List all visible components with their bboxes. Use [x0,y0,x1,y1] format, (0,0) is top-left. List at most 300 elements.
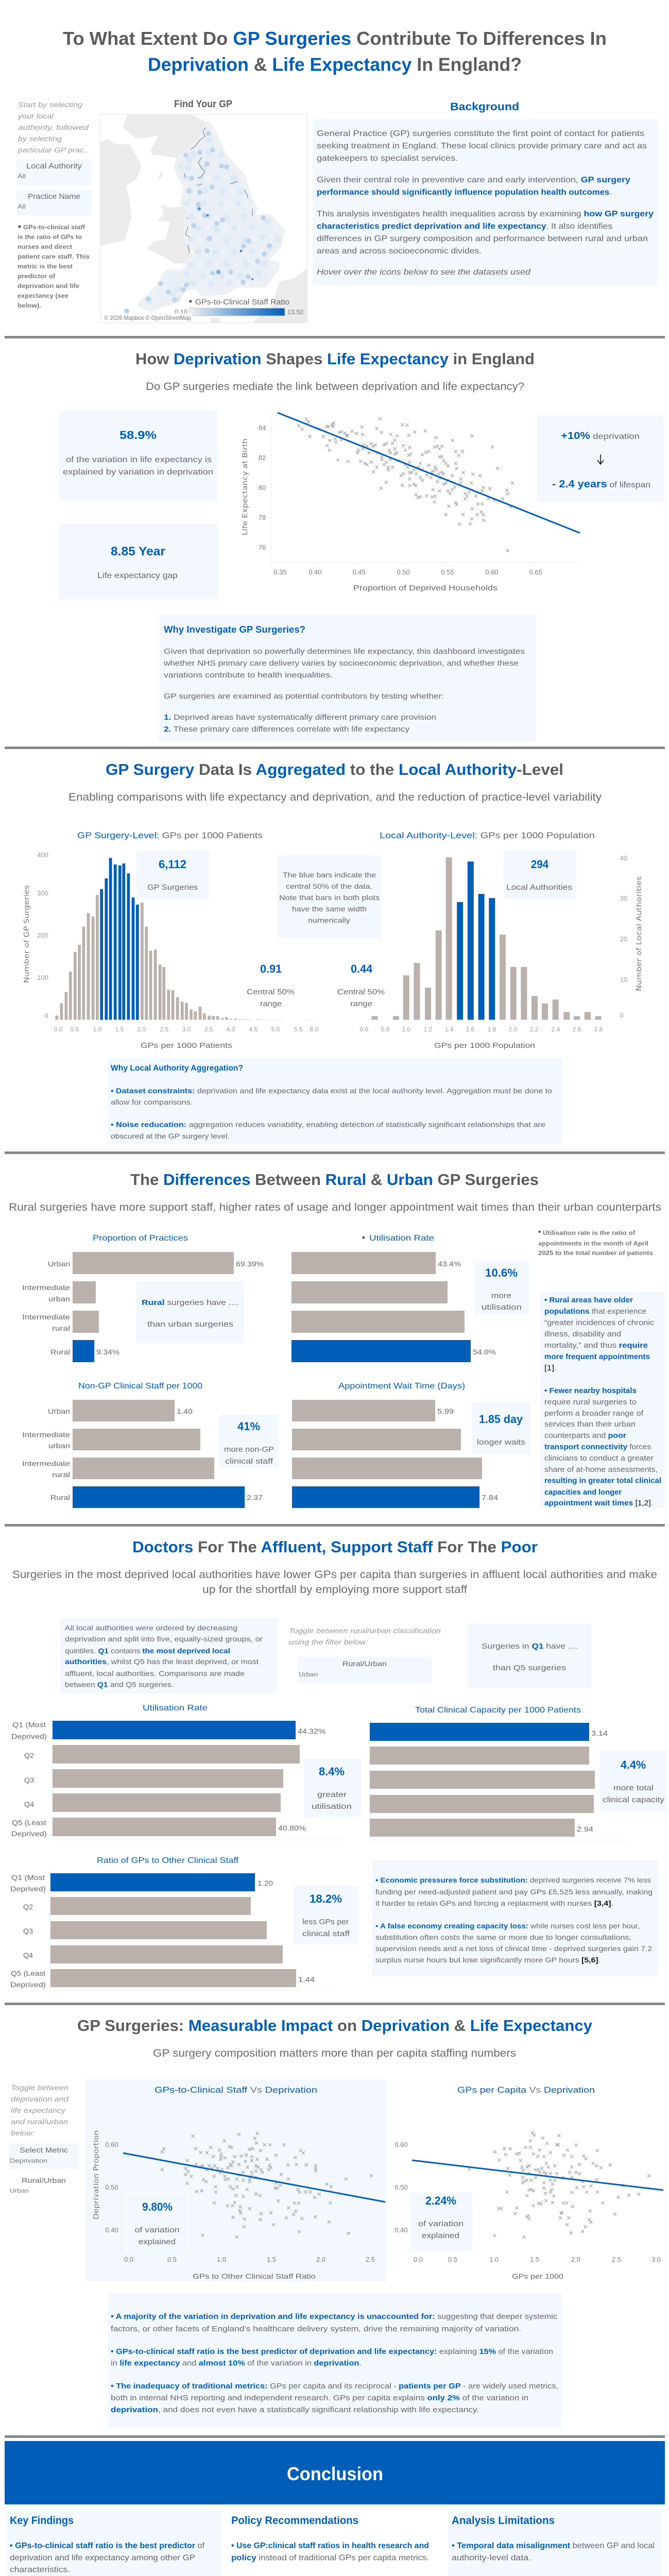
callout: surgeries in Q1 have [467,1623,592,1688]
land: Ireland [100,139,142,246]
bar chart: non-GP clinical staff: Rural [50,1493,70,1501]
bar chart: utilisation rate by quintile: Deprived) [11,1829,47,1838]
axis labels [242,424,542,592]
panel: rural explanation [540,1292,665,1508]
panel: background text: performance should significantly influence population health outcomes . [317,188,612,197]
points [299,419,512,551]
bar chart: utilisation rate: 54.0% [473,1348,496,1356]
callout: 4.4% more total clinical capacity: more total [613,1784,654,1792]
axis labels: 0.40 [105,2226,118,2234]
bar chart: proportion of practices [22,1234,264,1366]
callout: 10.6% more utilisation [474,1261,529,1314]
panel: rural explanation: perform a broader range of [544,1409,644,1418]
subtitle [12,1569,657,1596]
panel: why investigate GP surgeries: whether NHS primary care delivery varies by socioeconomic deprivation, and whether these [163,659,519,668]
panel: why local authority aggregation: • Dataset constraints: deprivation and life expectancy data exist at the local authority level. Aggregation must be done to [111,1087,552,1095]
note: blue bars explanation: The blue bars indicate the [283,871,376,879]
panel: why local authority aggregation: Why Local Authority Aggregation? [111,1064,243,1073]
panel: rural explanation: appointment wait times [1,2]. [544,1499,653,1507]
main title [63,28,607,75]
England base [140,124,282,309]
panel: scatter findings: • The inadequacy of traditional metrics: GPs per capita and its reciprocal - patients per GP - are widely used metrics, [111,2382,558,2391]
stat: 0.44 central range: 0.44 [351,962,373,975]
panel: scatter findings: • GPs-to-clinical staff ratio is the best predictor of deprivation and life expectancy: explaining 15% of the variation [111,2347,553,2356]
panel: analysis limitations: • Temporal data misalignment between GP and local [452,2541,655,2550]
panel: rural explanation: • Fewer nearby hospitals [544,1386,637,1395]
panel: rural explanation: • Rural areas have older [544,1296,633,1304]
callout: 18.2% less GPs per clinical staff: clinical staff [302,1929,350,1938]
axis labels: 1.5 [115,1026,124,1033]
note: utilisation rate definition: 2025 to the total number of patients [538,1249,653,1257]
callout: surgeries in Q1 have: than Q5 surgeries [493,1664,566,1672]
filter: select metric: Select Metric [20,2146,68,2154]
panel: why investigate GP surgeries: variations contribute to health inequalities. [164,671,333,680]
panel: quintile explanation: between Q1 and Q5 surgeries. [65,1681,174,1689]
bar chart: appointment wait time [292,1382,498,1512]
filter: select metric: Deprivation [10,2157,47,2164]
callout: 10.6% more utilisation: utilisation [482,1303,522,1312]
trend line [412,2160,663,2190]
bar chart: non-GP clinical staff: Non-GP Clinical Staff per 1000 [78,1382,202,1391]
heading: how deprivation shapes life expectancy: How Deprivation Shapes Life Expectancy in England [135,350,535,368]
callout: 1.85 day longer waits: 1.85 day [479,1413,523,1426]
panel: substitution explanation: funding per need-adjusted patient and pay GPs £5,525 less annually, making [375,1888,653,1896]
note: GPs-to-clinical staff definition: expectancy (see [18,292,68,299]
panel: background text: Given their central role in preventive care and early intervention, GP surgery [317,176,630,184]
filter: practice name: Practice Name [28,192,80,201]
bar chart: proportion of practices: rural [52,1324,70,1332]
panel: background text: characteristics predict deprivation and life expectancy . It also identifies [317,222,612,231]
axis labels: 0.0 [414,2256,423,2263]
bar chart: non-GP clinical staff: Urban [48,1407,70,1415]
stat card: 294 local authorities: 294 [531,858,549,871]
panel: policy recommendations [231,2515,439,2576]
instruction text: select local authority: particular GP prac.. [18,146,89,154]
bar chart: utilisation rate: Utilisation Rate [369,1234,434,1243]
callout: rural surgeries have [136,1281,244,1343]
filter: rural/urban [298,1657,432,1684]
panel: GPs-to-clinical staff vs deprivation scatter [86,2079,386,2281]
note: GPs-to-clinical staff definition: * [18,224,21,232]
callout: 9.80% of variation: explained [139,2238,176,2246]
note: blue bars explanation: have the same width [292,905,367,913]
panel: rural explanation: mortality,” and thus require [544,1341,648,1350]
instruction text: select local authority: Start by selecting [18,100,82,109]
bar chart: utilisation rate by quintile: Q4 [24,1800,34,1808]
panel: key findings [7,2511,222,2576]
note: GPs-to-clinical staff definition: below). [18,302,41,309]
filter: practice name: All [18,203,26,210]
axis labels: 2.8 [594,1026,603,1033]
stat card: 8.85 Year [59,524,218,599]
axis labels: 0 [620,1011,624,1019]
bar chart: ratio of GPs to other clinical staff: Deprived) [10,1885,46,1893]
trend line [123,2153,385,2202]
axis labels: 0.60 [485,568,499,576]
filter: select metric [9,2143,79,2169]
axis labels: 76 [259,544,266,551]
axis labels: 0.5 [71,1026,79,1033]
callout: 2.24% of variation [410,2193,472,2251]
bar chart: proportion of practices: Intermediate [22,1283,70,1292]
panel: background text: areas and across socioeconomic divides. [317,247,482,256]
axis labels: 100 [37,974,48,981]
filter: local authority [16,159,92,185]
bar chart: ratio of GPs to other clinical staff: Ratio of GPs to Other Clinical Staff [97,1856,239,1865]
histogram: GP surgery level [23,851,319,1050]
bar chart: non-GP clinical staff: Intermediate [22,1459,70,1467]
banner: Conclusion: Conclusion [287,2463,383,2484]
panel: rural explanation: [1]. [544,1364,557,1372]
note: blue bars explanation: numerically [308,916,350,924]
panel: rural explanation: require rural surgeries to [544,1398,637,1406]
bar chart: ratio of GPs to other clinical staff: 1.44 [298,1975,315,1984]
axis labels [360,854,643,1050]
callout: 1.85 day longer waits [472,1402,530,1454]
panel: analysis limitations: authority-level data. [452,2553,531,2563]
heading: measurable impact: GP Surgeries: Measurable Impact on Deprivation & Life Expectancy [77,2016,593,2035]
axis labels: Life Expectancy at Birth [242,438,249,535]
axis labels: 1.0 [489,2256,499,2263]
axis labels: 0.55 [441,568,454,576]
panel: GPs-to-clinical staff vs deprivation scatter: GPs-to-Clinical Staff Vs Deprivation [155,2085,317,2095]
axis labels: 0.5 [167,2256,177,2263]
bar chart: non-GP clinical staff: urban [48,1442,70,1450]
axis labels: 0.50 [105,2183,118,2191]
axis labels: 1.0 [93,1026,102,1033]
instruction text: toggle: Toggle between rural/urban classification [289,1626,441,1635]
bar chart: ratio of GPs to other clinical staff: Q4 [23,1951,33,1959]
panel: substitution explanation: it harder to retain GPs and forcing a replacment with nurses [3,4] . [375,1899,613,1907]
panel: scatter findings: deprivation , and does not even have a statistically significant relationship with life expectancy. [111,2405,479,2414]
bar chart: appointment wait time: 7.84 [482,1493,498,1501]
panel: why local authority aggregation: obscured at the GP surgery level. [111,1132,230,1140]
filter: rural/urban: Urban [10,2187,29,2194]
callout: 18.2% less GPs per clinical staff: less GPs per [302,1918,349,1926]
axis labels: 300 [37,889,48,897]
map of England GP surgeries [100,114,307,323]
bar chart: proportion of practices: Proportion of Practices [93,1234,188,1243]
instruction text: select local authority: by selecting [18,134,62,143]
callout: 41% more non-GP staff: 41% [237,1420,260,1433]
panel: why investigate GP surgeries: 2. These primary care differences correlate with life expectancy [164,725,410,734]
panel: background text: General Practice (GP) surgeries constitute the first point of contact for patients [317,129,644,138]
panel: rural explanation: “greater incidences of chronic [544,1318,655,1327]
axis labels: 80 [259,484,266,492]
bar chart: utilisation rate by quintile: Q5 (Least [12,1819,46,1827]
callout: 1.85 day longer waits: longer waits [477,1438,525,1447]
note: GPs-to-clinical staff definition: is the ratio of GPs to [18,233,82,241]
bar chart: non-GP clinical staff: Intermediate [22,1430,70,1438]
bar chart: proportion of practices: 9.34% [96,1348,119,1356]
axis labels: 0.40 [308,568,322,576]
heading: data aggregation: GP Surgery Data Is Aggregated to the Local Authority-Level [106,760,563,778]
axis labels: 10 [620,976,627,984]
axis labels: 0.8 [381,1026,390,1033]
note: utilisation rate definition [538,1229,653,1257]
axis labels: 0.0 [54,1026,63,1033]
stat: 0.44 central range [337,962,385,1008]
map legend: * [189,298,192,307]
callout: 41% more non-GP staff [219,1415,279,1468]
bar chart: utilisation rate: * [362,1234,365,1243]
axis labels: 0.35 [273,568,287,576]
bar chart: proportion of practices: Urban [48,1260,70,1268]
callout: 4.4% more total clinical capacity: 4.4% [621,1758,646,1771]
axis labels: 200 [37,931,48,939]
bar chart: total clinical capacity: Total Clinical Capacity per 1000 Patients [415,1706,581,1715]
heading: rural and urban differences: The Differences Between Rural & Urban GP Surgeries [130,1171,539,1189]
bar chart: utilisation rate by quintile: Deprived) [11,1732,47,1740]
axis labels: 0.65 [529,568,542,576]
panel: scatter findings: • A majority of the variation in deprivation and life expectancy is unaccounted for: suggesting that deeper systemic [111,2312,558,2321]
axis labels: 2.0 [509,1026,518,1033]
bar chart: proportion of practices: 69.39% [236,1260,264,1268]
bar chart: utilisation rate by quintile: Q2 [24,1751,34,1759]
axis labels: 2.5 [366,2256,375,2263]
panel: rural explanation: share of at-home assessments, [544,1465,658,1474]
stat card: 58.9%: 58.9% [119,429,157,442]
panel: background text: differences in GP surgery composition and performance between rural and urban [317,234,648,243]
panel: background text: Hover over the icons below to see the datasets used [317,268,531,277]
instruction text: toggle metric [11,2083,69,2137]
subtitle: GP surgery composition matters more than per capita staffing numbers [153,2047,516,2059]
bar chart: ratio of GPs to other clinical staff: Q3 [23,1927,33,1935]
land: France [251,268,307,323]
note: GPs-to-clinical staff definition: GPs-to-clinical staff [23,224,85,231]
callout: 8.4% greater utilisation: 8.4% [319,1765,345,1778]
axis labels: 1.8 [488,1026,496,1033]
bar chart: total clinical capacity [370,1706,627,1840]
instruction text: toggle metric: life expectancy [11,2106,66,2114]
callout: 2.24% of variation: of variation [418,2219,464,2228]
chart: GPs per capita vs deprivation scatter: GPs per Capita Vs Deprivation [457,2085,595,2095]
note: GPs-to-clinical staff definition: patient care staff. This [18,253,90,260]
axis labels: GPs per 1000 Patients [141,1041,232,1050]
stat card: 58.9% [59,411,218,501]
panel: rural explanation: populations that experience [544,1307,646,1316]
filter: local authority: All [18,173,26,180]
chart title: GP surgery level: GP Surgery-Level: GPs per 1000 Patients [77,831,263,840]
callout: 4.4% more total clinical capacity: clinical capacity [603,1795,665,1804]
axis labels: 2.0 [138,1026,146,1033]
bar chart: non-GP clinical staff: 2.37 [247,1493,263,1501]
callout: 8.4% greater utilisation: greater [317,1790,347,1799]
axis labels: 1.5 [530,2256,539,2263]
banner: Conclusion [5,2441,665,2504]
axis labels: 0.60 [105,2141,118,2148]
stat: 0.91 central range: Central 50% [247,988,295,996]
note: utilisation rate definition: appointments in the month of April [538,1240,648,1247]
panel: key findings: characteristics. [10,2566,70,2574]
stat card: 294 local authorities: Local Authorities [506,883,572,892]
axis labels: 1.4 [445,1026,454,1033]
callout: 18.2% less GPs per clinical staff: 18.2% [310,1892,342,1905]
axis labels: 1.0 [217,2256,226,2263]
callout: 18.2% less GPs per clinical staff [294,1886,358,1944]
panel: why investigate GP surgeries [159,614,536,741]
panel: policy recommendations: Policy Recommendations [231,2515,358,2527]
bar chart: ratio of GPs to other clinical staff [10,1856,330,1990]
bar chart: non-GP clinical staff [22,1382,263,1512]
trend line [278,413,580,533]
callout: +10% deprivation → -2.4 years: +10% deprivation [561,431,640,442]
axis labels: 0.5 [448,2256,457,2263]
callout: 2.24% of variation: explained [422,2231,459,2240]
axis labels: 2.5 [612,2256,621,2263]
axis labels: 0.40 [394,2226,408,2234]
axis labels: 2.6 [573,1026,581,1033]
stat: 0.44 central range: range [350,999,372,1008]
note: blue bars explanation: Note that bars in both plots [279,893,380,902]
subtitle: Rural surgeries have more support staff, higher rates of usage and longer appointment wait times than their urban counterparts [9,1201,661,1213]
axis labels: 0.50 [394,2183,408,2191]
instruction text: toggle metric: deprivation and [11,2095,69,2103]
axis labels: 2.4 [552,1026,560,1033]
panel: rural explanation: transport connectivity forces [544,1443,651,1451]
instruction text: select local authority [18,100,89,154]
axis labels: 84 [259,424,266,432]
axis labels: 1.6 [466,1026,475,1033]
axis labels: 1.0 [402,1026,411,1033]
axis labels: Deprivation Proportion [93,2130,100,2219]
main title: To What Extent Do GP Surgeries Contribute To Differences In [63,28,607,49]
axis labels: 2.0 [316,2256,325,2263]
land: Wales [147,205,195,264]
bar chart: non-GP clinical staff: rural [52,1470,70,1479]
note: blue bars explanation: central 50% of the data. [286,882,372,890]
bar chart: proportion of practices: Rural [50,1348,70,1356]
instruction text: toggle [289,1626,441,1646]
bar chart: ratio of GPs to other clinical staff: Q5 (Least [11,1969,45,1977]
panel: policy recommendations: policy instead of traditional GPs per capita metrics. [231,2553,429,2563]
filter: practice name [16,190,92,216]
callout: +10% deprivation → -2.4 years: - 2.4 years of lifespan [552,479,650,490]
axis labels: 3.5 [204,1026,213,1033]
bar chart: ratio of GPs to other clinical staff: 1.20 [258,1879,273,1887]
axis labels: Number of Local Authorities [636,876,643,991]
axis labels: 1.5 [267,2256,276,2263]
subtitle: Do GP surgeries mediate the link between deprivation and life expectancy? [146,381,524,393]
main title: Deprivation & Life Expectancy In England? [148,54,522,75]
instruction text: select local authority: authority, followed [18,123,89,131]
callout: 8.4% greater utilisation [304,1758,361,1817]
filter: rural/urban: Rural/Urban [22,2176,66,2184]
panel: rural explanation: clinicians to conduct a greater [544,1454,654,1463]
axis labels: 0.0 [124,2256,133,2263]
instruction text: toggle: using the filter below: [289,1638,368,1646]
panel: why local authority aggregation [108,1058,562,1144]
axis labels: 20 [620,935,627,943]
subtitle: Enabling comparisons with life expectancy and deprivation, and the reduction of practice-level variability [68,791,602,803]
subtitle: Surgeries in the most deprived local authorities have lower GPs per capita than surgeries in affluent local authorities and make [12,1569,657,1581]
stat: 0.44 central range: Central 50% [337,988,385,996]
bar chart: total clinical capacity: 2.94 [577,1825,593,1833]
callout: 41% more non-GP staff: clinical staff [225,1457,273,1466]
axis labels: 1.2 [424,1026,433,1033]
axis labels: Proportion of Deprived Households [353,584,498,592]
axis labels: 40 [620,854,627,862]
panel: why local authority aggregation: • Noise reducation: aggregation reduces variability, enabling detection of statistically significant relationships that are [111,1120,545,1128]
panel: rural explanation: services than their urban [544,1420,636,1429]
filter: rural/urban: Rural/Urban [342,1659,387,1668]
map legend: GPs-to-Clinical Staff Ratio [195,298,289,307]
axis labels: Number of GP Surgeries [23,885,31,983]
bar chart: appointment wait time: Appointment Wait Time (Days) [338,1382,465,1391]
map legend: 13.50 [287,308,303,316]
axis labels [23,851,319,1050]
icon: down arrow [597,454,604,464]
panel: background text: seeking treatment in England. These local clinics provide primary care and act as [317,142,647,150]
panel: key findings: Key Findings [10,2515,74,2527]
axis labels: GPs to Other Clinical Staff Ratio [193,2272,316,2280]
bar chart: appointment wait time: 5.99 [437,1407,454,1415]
panel: why local authority aggregation: allow for comparisons. [111,1098,193,1106]
panel: why investigate GP surgeries: 1. Deprived areas have systematically different primary care provision [164,713,436,722]
panel: substitution explanation: supervision needs and a net loss of clinical time - deprived surgeries gain 7.2 [375,1944,652,1953]
points [469,2133,649,2237]
callout: 10.6% more utilisation: 10.6% [485,1266,518,1279]
stat card: 8.85 Year: Life expectancy gap [97,571,178,580]
axis labels: 0.45 [352,568,366,576]
axis labels: 82 [259,454,266,462]
panel: rural explanation: resulting in greater total clinical [544,1477,661,1485]
axis labels: 6.0 [310,1026,319,1033]
panel: quintile explanation: authorities , whilst Q5 has the least deprived, or most [65,1657,259,1666]
callout: 10.6% more utilisation: more [491,1291,511,1300]
filter: rural/urban [10,2176,66,2194]
axis labels: 0.50 [397,568,410,576]
points [162,2133,371,2237]
bar chart: total clinical capacity: 3.14 [591,1729,608,1737]
panel: scatter findings: factors, or other facets of England’s healthcare delivery system, drive the remaining majority of variation. [111,2325,521,2333]
heading: doctors for the affluent: Doctors For The Affluent, Support Staff For The Poor [132,1538,538,1556]
GP surgery bubbles [144,131,276,304]
instruction text: select local authority: your local [18,112,54,120]
stat card: 58.9%: explained by variation in deprivation [63,468,213,477]
stat: 0.91 central range: range [260,999,282,1008]
axis labels: 2.5 [160,1026,169,1033]
panel: why investigate GP surgeries: GP surgeries are examined as potential contributors by testing whether: [164,692,444,701]
panel: scatter findings: in life expectancy and almost 10% of the variation in deprivation . [111,2359,362,2368]
axis labels: 30 [620,894,627,902]
panel: policy recommendations: • Use GP:clinical staff ratios in health research and [231,2541,429,2550]
axis labels [394,2141,661,2280]
stat card: 8.85 Year: 8.85 Year [111,545,165,558]
bar chart: proportion of practices: Intermediate [22,1313,70,1321]
axis labels: 3.0 [182,1026,191,1033]
histogram: local authority level [360,854,643,1050]
callout: 9.80% of variation: of variation [135,2226,179,2234]
bar chart: utilisation rate by quintile [11,1704,345,1840]
axis labels: 3.0 [651,2256,661,2263]
axis labels: 4.5 [249,1026,258,1033]
panel: key findings: deprivation and life expectancy among other GP [10,2553,195,2563]
panel: background text: This analysis investigates health inequalities across by examining how GP surgery [317,210,654,218]
map legend [175,298,303,316]
callout: 41% more non-GP staff: more non-GP [224,1445,274,1454]
callout: 9.80% of variation: 9.80% [142,2200,173,2213]
callout: 2.24% of variation: 2.24% [425,2194,456,2207]
panel: background text [313,119,658,285]
axis labels: 0 [44,1012,48,1020]
axis labels: 0.60 [394,2141,408,2148]
panel: rural explanation: counterparts and poor [544,1431,626,1440]
axis labels [93,2130,375,2280]
bar chart: non-GP clinical staff: 1.40 [177,1407,193,1415]
panel: rural explanation: more frequent appointments [544,1352,650,1361]
axis labels: 5.5 [294,1026,303,1033]
